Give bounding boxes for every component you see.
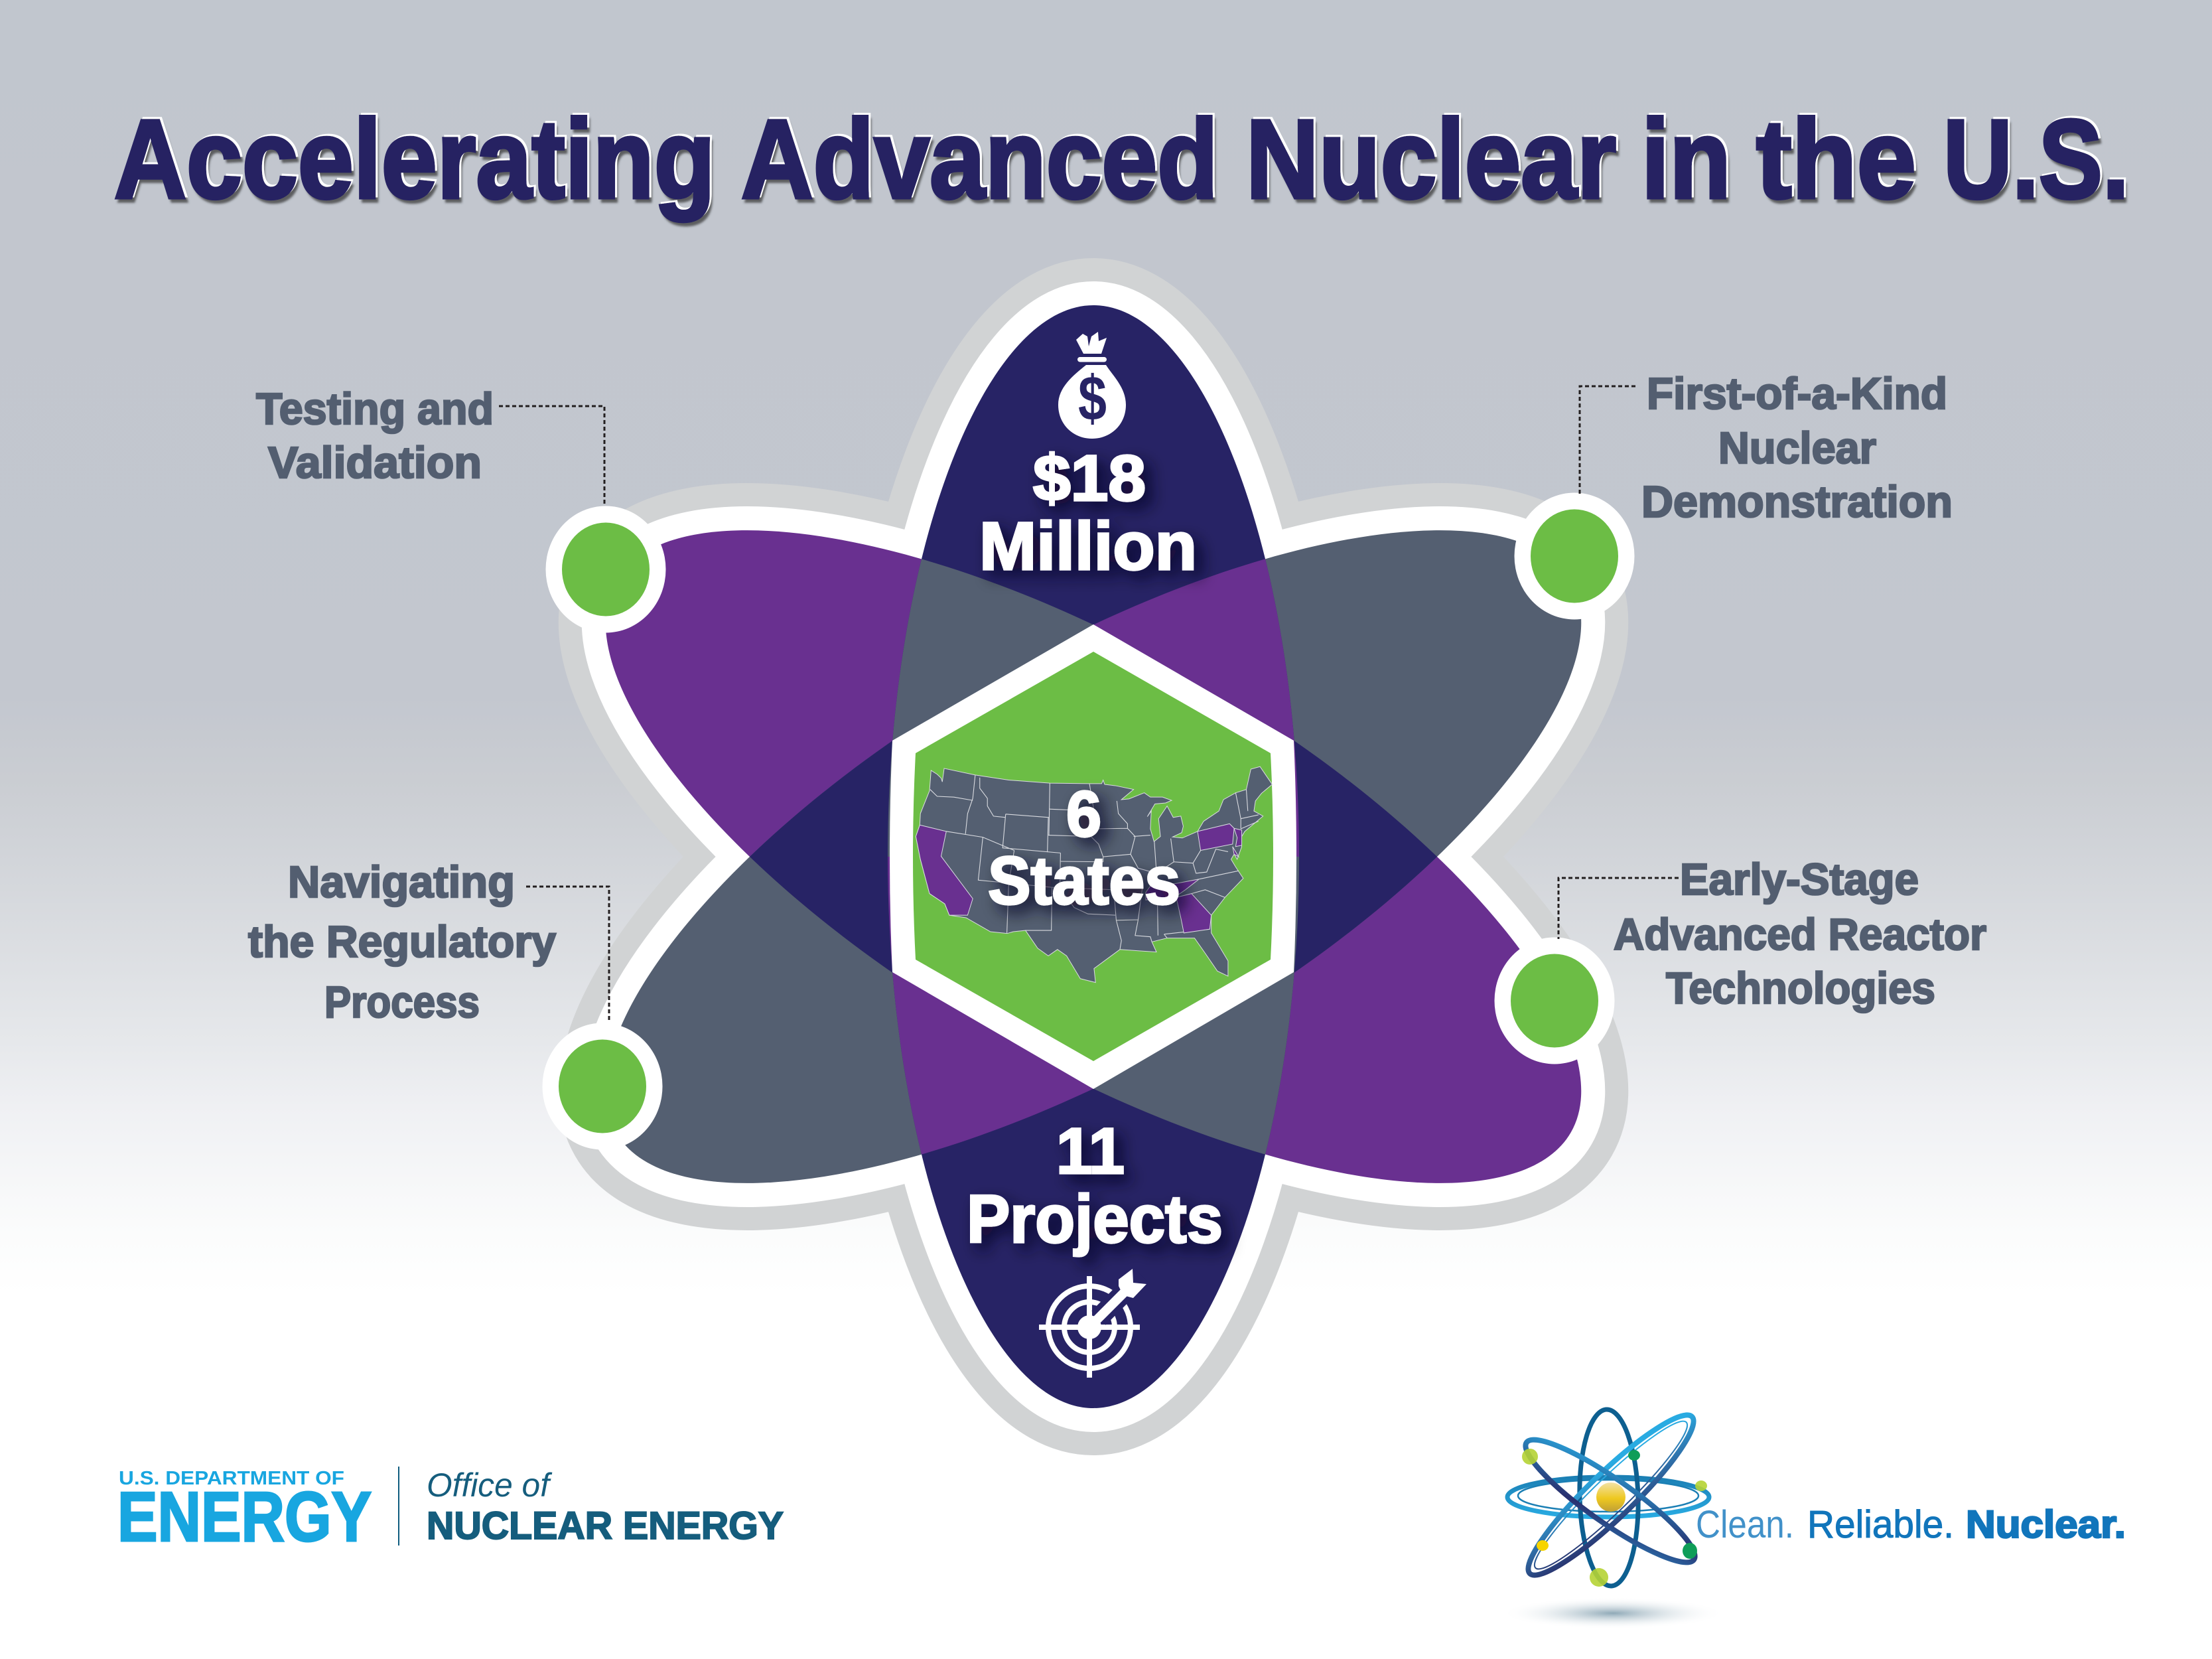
US map — [916, 766, 1272, 983]
tagline — [1696, 1503, 2126, 1546]
hexagon white border — [890, 624, 1296, 1089]
atom outer gray halo — [513, 305, 1674, 1408]
leader line: first-of-a-kind — [1580, 386, 1635, 494]
overlap: side navy wedges — [750, 741, 1437, 973]
stat: 6 States: States — [988, 843, 1180, 918]
stat: $18 Million: $18 — [1033, 442, 1146, 514]
stat: $18 Million — [979, 442, 1197, 584]
label: first-of-a-kind nuclear demonstration: Nuclear — [1718, 423, 1876, 473]
tagline: Clean. — [1696, 1503, 1794, 1546]
title: Accelerating — [114, 96, 715, 222]
label: navigating the regulatory process — [248, 857, 556, 1027]
orbit: purple lobe top-left to bottom-right — [513, 403, 1674, 1311]
label: first-of-a-kind nuclear demonstration: Demonstration — [1641, 477, 1953, 527]
map: state borders — [930, 775, 1259, 950]
title: U.S. — [1943, 96, 2129, 222]
title: the — [1756, 96, 1916, 222]
title: Advanced — [741, 96, 1218, 222]
logo: U.S. Department of Energy, Office of Nuclear Energy: Office of — [427, 1467, 553, 1504]
emblem shadow — [1501, 1597, 1724, 1629]
label: early-stage advanced reactor technologies: Technologies — [1666, 964, 1935, 1013]
stat: 11 Projects — [967, 1115, 1223, 1257]
icon: money bag — [1058, 332, 1126, 439]
overlap: vertical with slate lobe — [888, 559, 1299, 1155]
node: top right — [1514, 492, 1635, 620]
map: highlighted states — [916, 824, 1242, 933]
stat: 6 States — [988, 778, 1180, 918]
stat: 6 States: 6 — [1066, 778, 1101, 850]
icon: target with arrow — [1039, 1269, 1146, 1378]
logo: U.S. Department of Energy, Office of Nuclear Energy — [117, 1467, 784, 1556]
tagline: Nuclear. — [1966, 1503, 2126, 1546]
node: bottom right — [1494, 937, 1615, 1064]
centre hexagon — [890, 624, 1296, 1089]
hexagon green fill — [913, 652, 1273, 1061]
label: testing and validation: Validation — [268, 438, 482, 488]
emblem nucleus — [1596, 1482, 1625, 1512]
title — [114, 96, 2129, 222]
label: first-of-a-kind nuclear demonstration: First-of-a-Kind — [1647, 369, 1947, 419]
stat: $18 Million: Million — [979, 508, 1197, 584]
label: navigating the regulatory process: the Regulatory — [248, 917, 556, 967]
label: early-stage advanced reactor technologies: Early-Stage — [1680, 855, 1919, 904]
leader line: early-stage — [1558, 878, 1679, 939]
node: top left — [545, 506, 666, 633]
title: Nuclear — [1246, 96, 1616, 222]
leader line: navigating regulatory process — [526, 887, 609, 1022]
emblem orbits — [1507, 1400, 1709, 1590]
label: navigating the regulatory process: Navigating — [288, 857, 515, 907]
map: contiguous states silhouette — [916, 766, 1272, 983]
label: testing and validation — [256, 384, 494, 488]
atom white outline — [513, 305, 1674, 1408]
title: in — [1641, 96, 1731, 222]
label: testing and validation: Testing and — [256, 384, 494, 434]
icon: money bag: $ — [1078, 363, 1107, 434]
emblem electrons — [1522, 1449, 1707, 1587]
logo: atom emblem — [1501, 1400, 1724, 1629]
overlap: vertical with purple lobe — [888, 559, 1299, 1155]
orbit: navy vertical lobe — [888, 305, 1299, 1408]
leader line: testing and validation — [499, 406, 604, 506]
label: early-stage advanced reactor technologies: Advanced Reactor — [1614, 910, 1986, 960]
logo: U.S. Department of Energy, Office of Nuclear Energy: ENERGY — [117, 1478, 372, 1556]
node: bottom left — [543, 1023, 662, 1149]
logo: U.S. Department of Energy, Office of Nuclear Energy: U.S. DEPARTMENT OF — [119, 1468, 344, 1489]
label: first-of-a-kind nuclear demonstration — [1641, 369, 1953, 527]
label: early-stage advanced reactor technologies — [1614, 855, 1986, 1013]
stat: 11 Projects: 11 — [1056, 1115, 1125, 1187]
stat: 11 Projects: Projects — [967, 1181, 1223, 1257]
atom diagram — [513, 265, 1674, 1460]
tagline: Reliable. — [1807, 1503, 1954, 1546]
orbit: slate lobe bottom-left to top-right — [513, 403, 1674, 1311]
label: navigating the regulatory process: Process — [324, 977, 480, 1027]
logo: U.S. Department of Energy, Office of Nuclear Energy: NUCLEAR ENERGY — [427, 1504, 784, 1548]
